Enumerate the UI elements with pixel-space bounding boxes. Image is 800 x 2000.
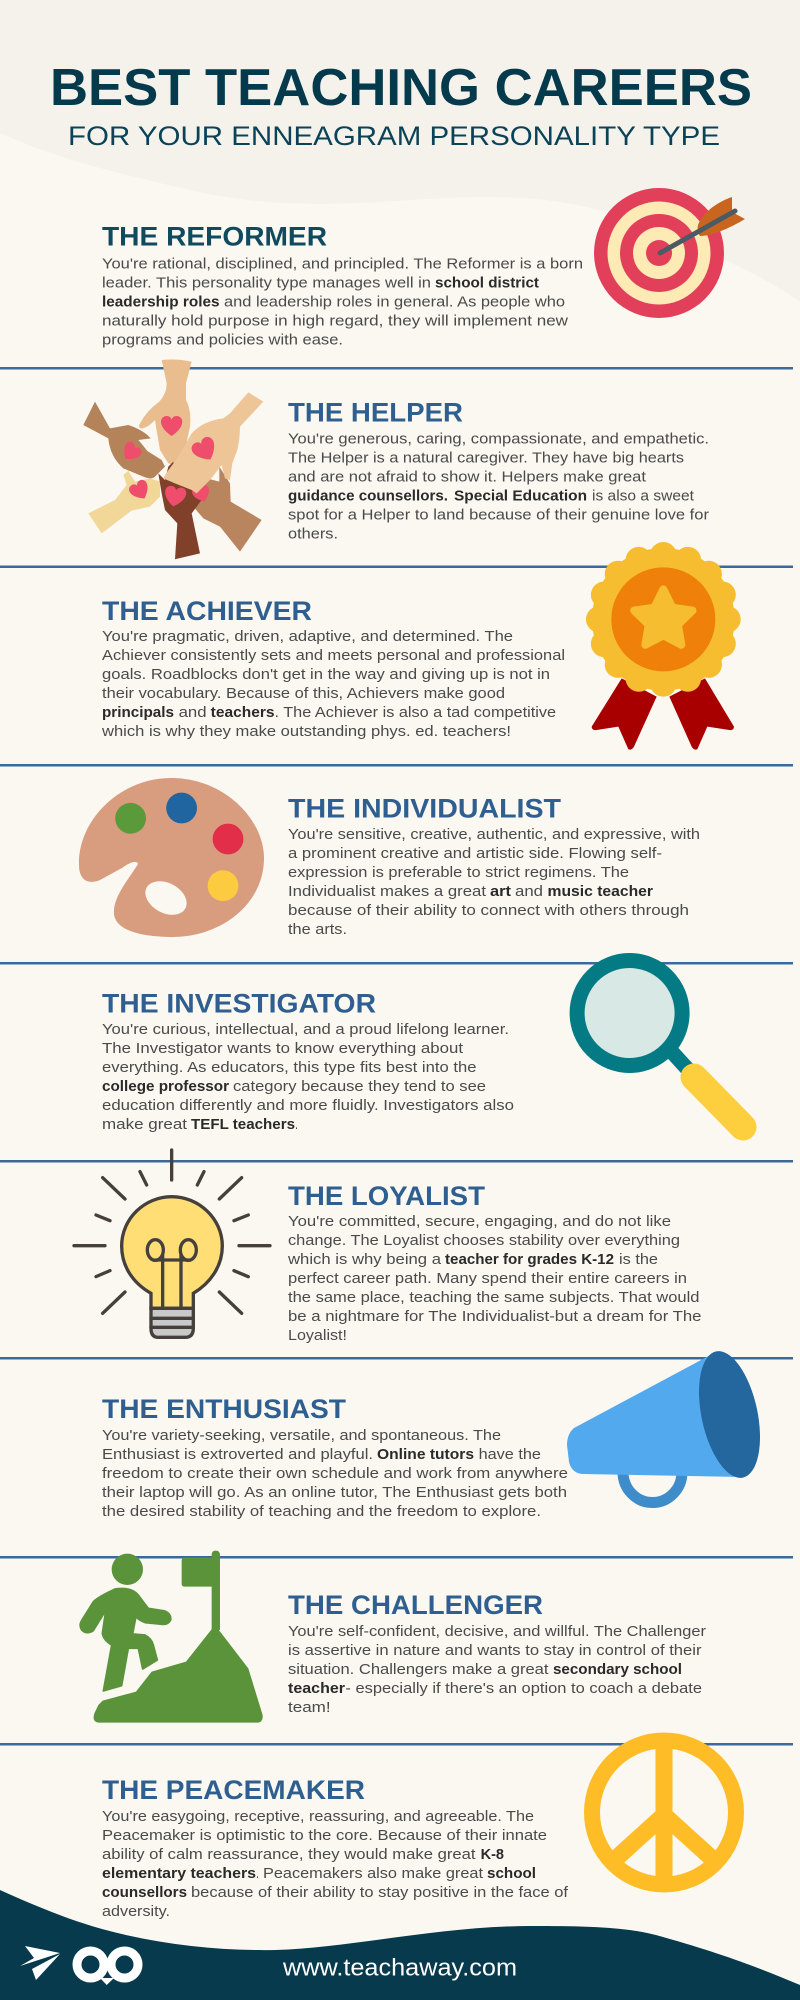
panel: the loyalist [74, 1150, 701, 1344]
text block: peacemaker description: adversity. [102, 1904, 170, 1920]
panel: the challenger [80, 1551, 706, 1723]
text block: reformer description: You're rational, disciplined, and principled. The Reformer is a born [102, 256, 583, 272]
text block: peacemaker description: Peacemaker is optimistic to the core. Because of their innate [102, 1828, 547, 1844]
text block: investigator description: The Investigator wants to know everything about [102, 1041, 463, 1057]
text block: individualist description: You're sensitive, creative, authentic, and expressive, with [288, 827, 700, 843]
text block: reformer description: and leadership roles in general. As people who [224, 294, 565, 310]
icon: paint palette [79, 778, 264, 937]
text block: individualist description: because of their ability to connect with others through [288, 903, 689, 919]
icon: magnifying glass [577, 960, 743, 1127]
text block: achiever description: their vocabulary. Because of this, Achievers make good [102, 686, 505, 702]
text block: investigator description: TEFL teachers [191, 1117, 295, 1133]
text block: peacemaker description: K-8 [481, 1847, 504, 1863]
heading: the helper: THE HELPER [288, 398, 463, 428]
icon: light bulb [74, 1150, 270, 1337]
icon: person climbing mountain to flag [80, 1551, 263, 1723]
text block: helper description: others. [288, 526, 338, 542]
text block: investigator description: college professor [102, 1079, 229, 1095]
text block: individualist description: and [515, 884, 543, 900]
text block: helper description: Special Education [454, 488, 587, 504]
text block: enthusiast description: have the [479, 1447, 541, 1463]
footer [20, 1946, 517, 1985]
text block: peacemaker description: Peacemakers also make great [263, 1866, 483, 1882]
text block: reformer description [102, 256, 583, 348]
text block: individualist description: a prominent creative and artistic side. Flowing self- [288, 846, 662, 862]
text block: achiever description [101, 629, 565, 740]
text block: achiever description: . The Achiever is also a tad competitive [274, 705, 556, 721]
text block: achiever description: teachers [211, 705, 274, 721]
text block: individualist description: music teacher [548, 884, 653, 900]
text block: achiever description: and [179, 705, 207, 721]
text block: challenger description [288, 1624, 706, 1716]
text block: enthusiast description [102, 1428, 568, 1520]
text block: loyalist description: change. The Loyalist chooses stability over everything [288, 1233, 680, 1249]
text block: enthusiast description: their laptop will go. As an online tutor, The Enthusiast gets both [102, 1485, 567, 1501]
text block: helper description: spot for a Helper to land because of their genuine love for [288, 507, 709, 523]
heading: the individualist: THE INDIVIDUALIST [288, 794, 561, 824]
text block: enthusiast description: Online tutors [377, 1447, 474, 1463]
heading: the investigator: THE INVESTIGATOR [102, 989, 376, 1019]
text block: challenger description: - especially if there's an option to coach a debate [345, 1681, 702, 1697]
text block: investigator description: everything. As educators, this type fits best into the [102, 1060, 476, 1076]
text block: reformer description: programs and policies with ease. [102, 332, 343, 348]
text block: loyalist description: Loyalist! [288, 1328, 347, 1344]
text block: helper description: You're generous, caring, compassionate, and empathetic. [288, 431, 709, 447]
icon: megaphone [567, 1346, 770, 1503]
heading: the reformer: THE REFORMER [102, 222, 327, 252]
text block: investigator description: . [295, 1117, 298, 1133]
panel: the investigator [102, 960, 743, 1133]
text block: achiever description: goals. Roadblocks don't get in the way and giving up is not in [102, 667, 550, 683]
text block: peacemaker description: You're easygoing, receptive, reassuring, and agreeable. The [102, 1809, 534, 1825]
text block: investigator description [102, 1022, 514, 1133]
text block: reformer description: leader. This personality type manages well in [102, 275, 431, 291]
text block: investigator description: You're curious, intellectual, and a proud lifelong learner. [102, 1022, 509, 1038]
text block: reformer description: leadership roles [102, 294, 220, 310]
text block: helper description: and are not afraid to show it. Helpers make great [288, 469, 646, 485]
text block: loyalist description [287, 1214, 702, 1344]
heading: the achiever: THE ACHIEVER [102, 596, 312, 626]
icon: hands holding hearts [83, 359, 263, 559]
text block: achiever description: You're pragmatic, driven, adaptive, and determined. The [102, 629, 513, 645]
heading: the challenger: THE CHALLENGER [288, 1590, 543, 1620]
website url: www.teachaway.com [282, 1955, 517, 1982]
text block: loyalist description: teacher for grades K-12 [445, 1252, 614, 1268]
text block: loyalist description: the same place, teaching the same subjects. That would [288, 1290, 700, 1306]
text block: achiever description: principals [102, 705, 174, 721]
footer wave background [0, 1890, 800, 2000]
icon: paper plane logo [20, 1946, 60, 1980]
text block: loyalist description: be a nightmare for The Individualist-but a dream for The [288, 1309, 702, 1325]
panel: the enthusiast [102, 1346, 770, 1520]
icon: teach away infinity logo [77, 1951, 138, 1985]
panel: the helper [83, 359, 709, 559]
text block: achiever description: which is why they make outstanding phys. ed. teachers! [101, 724, 511, 740]
text block: achiever description: Achiever consistently sets and meets personal and professional [102, 648, 565, 664]
panel: the individualist [79, 778, 700, 938]
text block: peacemaker description: elementary teachers [102, 1866, 256, 1882]
text block: peacemaker description: counsellors [102, 1885, 187, 1901]
text block: enthusiast description: You're variety-seeking, versatile, and spontaneous. The [102, 1428, 501, 1444]
text block: challenger description: You're self-confident, decisive, and willful. The Challenger [288, 1624, 706, 1640]
text block: enthusiast description: freedom to create their own schedule and work from anywhere [102, 1466, 568, 1482]
text block: challenger description: situation. Challengers make a great [288, 1662, 548, 1678]
text block: peacemaker description: school [487, 1866, 536, 1882]
text block: individualist description [288, 827, 700, 938]
text block: investigator description: make great [102, 1117, 187, 1133]
text block: enthusiast description: Enthusiast is extroverted and playful. [102, 1447, 373, 1463]
text block: individualist description: the arts. [288, 922, 347, 938]
text block: peacemaker description [102, 1809, 569, 1920]
text block: peacemaker description: because of their ability to stay positive in the face of [191, 1885, 569, 1901]
text block: investigator description: education differently and more fluidly. Investigators also [102, 1098, 514, 1114]
text block: challenger description: team! [288, 1700, 331, 1716]
icon: target with arrow [594, 188, 745, 318]
text block: individualist description: expression is preferable to strict regimens. The [288, 865, 629, 881]
icon: award rosette with star [586, 542, 741, 750]
text block: individualist description: art [490, 884, 511, 900]
title: BEST TEACHING CAREERS [50, 58, 752, 116]
panel: the achiever [101, 542, 741, 750]
subtitle: FOR YOUR ENNEAGRAM PERSONALITY TYPE [68, 121, 720, 151]
text block: helper description: The Helper is a natural caregiver. They have big hearts [288, 450, 684, 466]
text block: challenger description: is assertive in nature and wants to stay in control of their [288, 1643, 702, 1659]
text block: investigator description: category because they tend to see [233, 1079, 486, 1095]
panel: the reformer [102, 188, 745, 348]
panel: the peacemaker [102, 1740, 736, 1920]
text block: helper description: guidance counsellors. [288, 488, 448, 504]
text block: loyalist description: perfect career path. Many spend their entire careers in [288, 1271, 687, 1287]
text block: helper description: is also a sweet [592, 488, 694, 504]
text block: reformer description: school district [435, 275, 539, 291]
text block: challenger description: secondary school [553, 1662, 682, 1678]
text block: loyalist description: You're committed, secure, engaging, and do not like [288, 1214, 671, 1230]
text block: challenger description: teacher [288, 1681, 345, 1697]
text block: enthusiast description: the desired stability of teaching and the freedom to explore. [102, 1504, 541, 1520]
text block: peacemaker description: ability of calm reassurance, they would make great [102, 1847, 475, 1863]
icon: peace sign [592, 1740, 736, 1885]
text block: reformer description: naturally hold purpose in high regard, they will implement new [102, 313, 569, 329]
text block: loyalist description: is the [619, 1252, 658, 1268]
text block: peacemaker description: . [256, 1866, 259, 1882]
text block: loyalist description: which is why being a [287, 1252, 442, 1268]
heading: the peacemaker: THE PEACEMAKER [102, 1775, 365, 1805]
heading: the enthusiast: THE ENTHUSIAST [102, 1394, 346, 1424]
text block: individualist description: Individualist makes a great [288, 884, 486, 900]
heading: the loyalist: THE LOYALIST [288, 1181, 485, 1211]
text block: helper description [288, 431, 709, 542]
title block [50, 58, 752, 151]
